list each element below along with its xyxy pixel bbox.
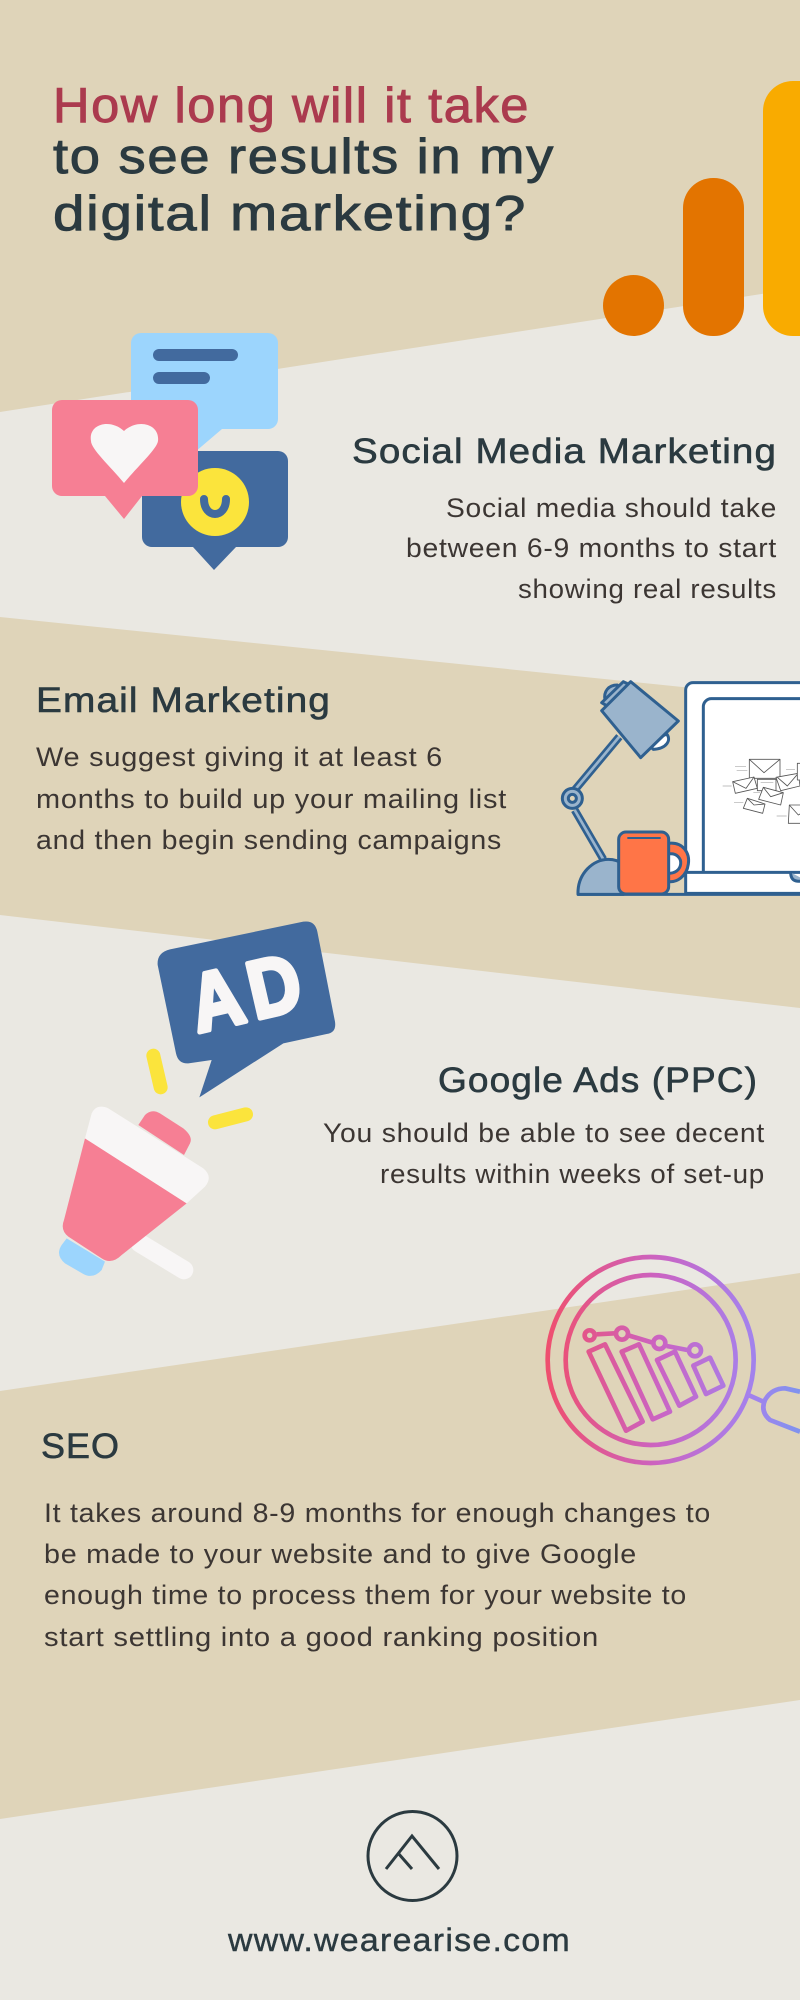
- text: SEO body: be made to your website and to give Google: [44, 1539, 637, 1569]
- text: google ads body: [323, 1118, 765, 1189]
- megaphone collar: [85, 1107, 209, 1203]
- bubble label: AD: AD: [181, 935, 317, 1050]
- speech bubble: [158, 921, 335, 1097]
- text: SEO body: enough time to process them for your website to: [44, 1580, 687, 1610]
- text: email body: We suggest giving it at least 6: [36, 742, 443, 772]
- text: social media body: [406, 493, 777, 604]
- website url: www.wearearise.com: [227, 1922, 571, 1958]
- megaphone handle: [140, 1243, 184, 1270]
- text: SEO body: start settling into a good ranking position: [44, 1622, 599, 1652]
- background band: SEO: [0, 1273, 800, 1819]
- text: social media body: between 6-9 months to start: [406, 533, 777, 563]
- text: SEO body: [44, 1498, 711, 1652]
- text: google ads body: You should be able to see decent: [323, 1118, 765, 1148]
- heading: social media marketing: Social Media Marketing: [352, 432, 777, 471]
- yellow sparks: [153, 1056, 246, 1122]
- text: email body: [36, 742, 507, 855]
- heading: email marketing: Email Marketing: [36, 681, 331, 720]
- icon: desk lamp, laptop and mug: [562, 682, 800, 894]
- title: to see results in my: [53, 130, 555, 184]
- text: social media body: Social media should take: [446, 493, 777, 523]
- title: digital marketing?: [53, 187, 527, 241]
- text: email body: and then begin sending campaigns: [36, 825, 502, 855]
- icon: analytics bars: [603, 81, 800, 336]
- text: google ads body: results within weeks of set-up: [380, 1159, 765, 1189]
- background band: email: [0, 617, 800, 1008]
- background band: header: [0, 0, 800, 412]
- megaphone grip: [59, 1238, 105, 1276]
- icon: megaphone with AD speech bubble: [59, 921, 335, 1276]
- icon: social media chat bubbles: [52, 333, 288, 570]
- logo: [368, 1812, 457, 1900]
- heading: SEO: SEO: [41, 1427, 120, 1466]
- text: social media body: showing real results: [518, 574, 777, 604]
- text: SEO body: It takes around 8-9 months for enough changes to: [44, 1498, 711, 1528]
- title: [53, 79, 555, 241]
- megaphone body: [63, 1138, 187, 1261]
- megaphone rear: [138, 1111, 191, 1155]
- title: How long will it take: [53, 79, 530, 133]
- text: email body: months to build up your mailing list: [36, 784, 507, 814]
- icon: magnifier over bar chart: [548, 1257, 800, 1463]
- heading: google ads: Google Ads (PPC): [438, 1061, 758, 1100]
